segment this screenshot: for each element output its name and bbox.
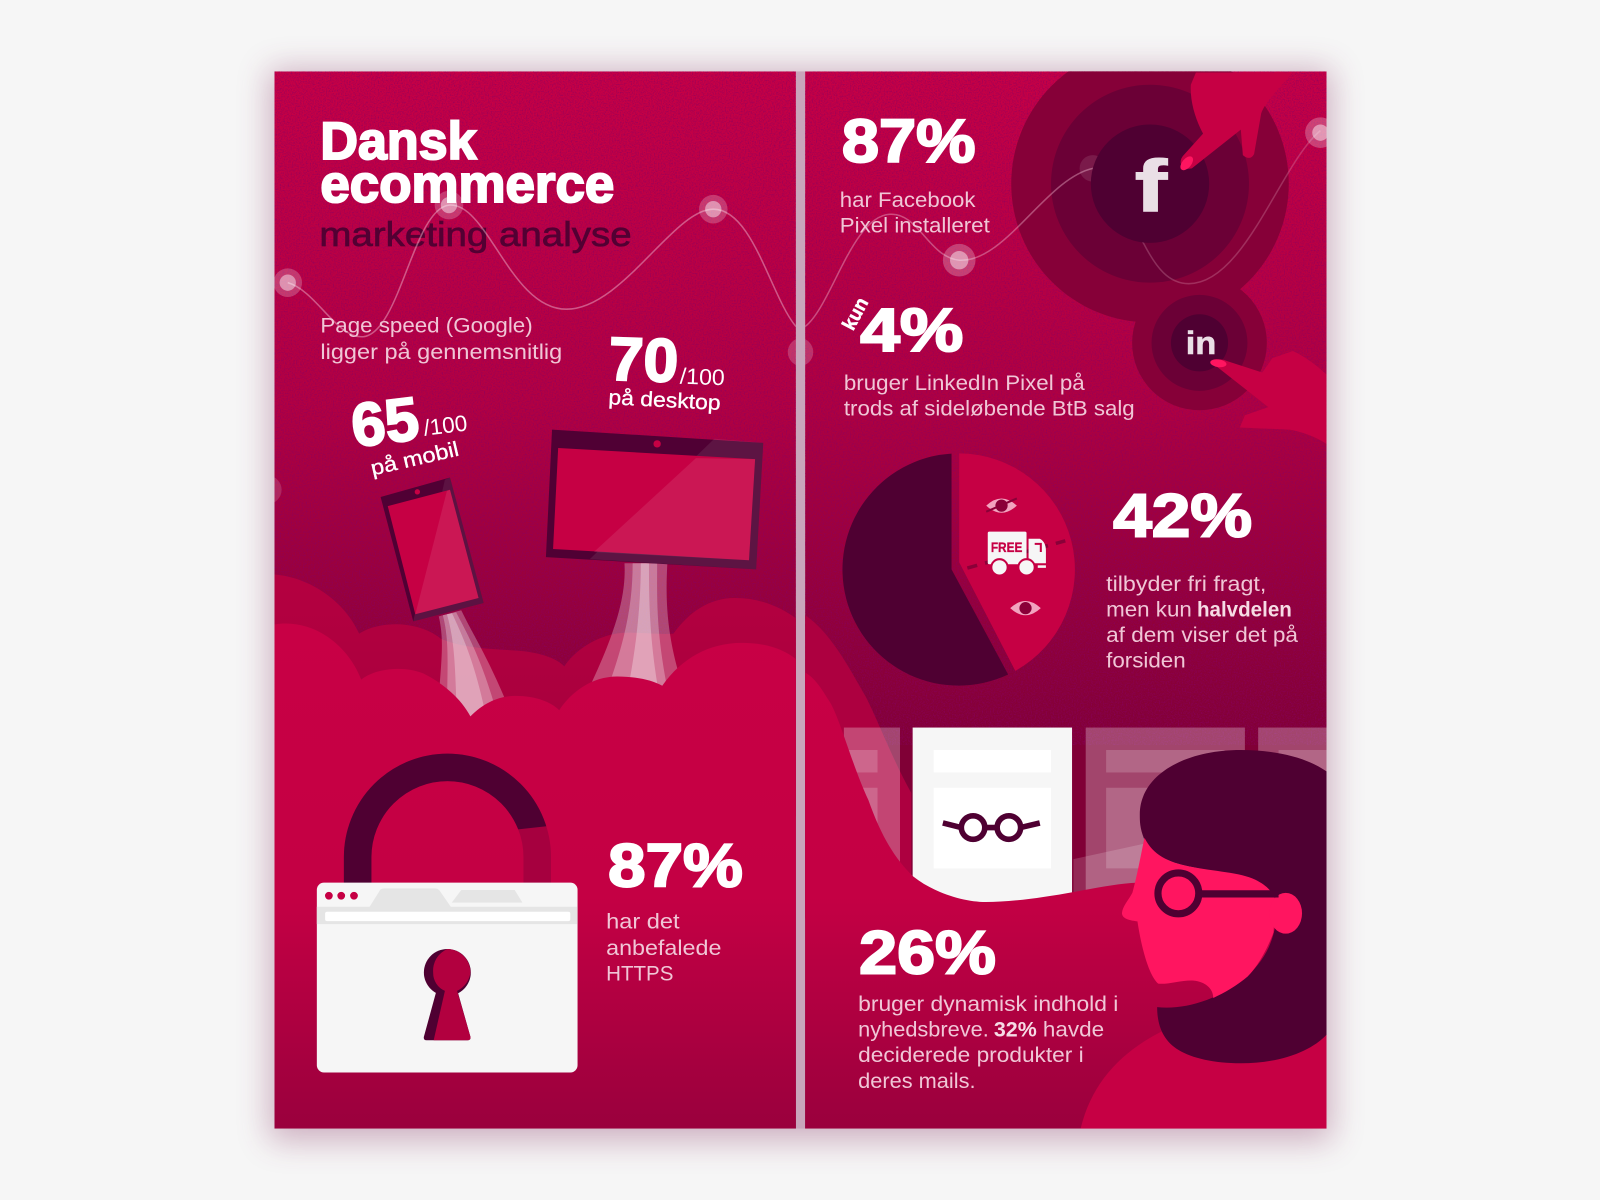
icon: free delivery truck: FREE [991,540,1022,555]
icon: crossed out eye [986,498,1017,513]
shirt [1081,1026,1327,1129]
stat: 26% newsletters: deciderede produkter i [858,1044,1084,1067]
stat: 42% free shipping: 42% [1113,482,1252,550]
hand pointing at linkedin [1210,351,1327,444]
pie chart [842,453,1075,686]
facebook target outer circles [1011,45,1289,322]
panel shadow [269,69,1332,1141]
stat: 4% linkedin: kun [838,294,873,334]
clouds back [274,574,796,816]
stat: 26% newsletters: 26% [859,918,996,986]
left grain texture [274,71,796,666]
hand pointing at facebook [1178,72,1293,172]
linkedin target circles [1132,276,1267,410]
panel: left [253,71,816,1129]
title: ecommerce [320,155,614,214]
back wave [805,615,911,918]
stat: 65/100 mobile [352,396,466,480]
face [1122,838,1276,998]
stat: 4% linkedin [838,294,1135,420]
stat: 42% free shipping: men kun [1106,598,1192,621]
sight beam [1073,843,1148,898]
left background [274,71,796,1129]
stat: 65/100 mobile: 65 [347,384,423,460]
stat: 87% facebook [841,118,990,232]
stat: 42% free shipping [1106,482,1298,672]
stat: 87% facebook: 87% [842,107,976,175]
phone beam [438,610,504,716]
stat: 4% linkedin: 4% [860,296,963,364]
stat: 70/100 desktop: 70 [608,325,679,395]
stat: 4% linkedin: trods af sideløbende BtB salg [844,397,1135,420]
title: Dansk [320,112,477,171]
stat: 87% facebook: har Facebook [840,189,976,212]
panel: right [785,45,1336,1129]
browser dots [325,892,358,900]
stat: 42% free shipping: af dem viser det på [1106,624,1298,647]
stat: 26% newsletters: havde [1043,1019,1104,1042]
glasses on face [1158,873,1279,914]
stat: 87% https: HTTPS [606,963,673,986]
title: marketing analyse [319,216,632,254]
icon: facebook f: f [1135,144,1168,227]
gap between panels [796,71,805,1129]
icon: eye [1010,601,1041,615]
facebook target inner circle [1091,124,1209,243]
stat: 65/100 mobile: /100 [422,411,469,441]
stat: 70/100 desktop: /100 [679,364,725,390]
stat: 65/100 mobile: på mobil [368,438,461,480]
newsletter card highlighted [913,728,1072,906]
stat: 87% facebook: Pixel installeret [840,215,990,238]
page speed intro text: ligger på gennemsnitlig [320,341,562,364]
icon: free delivery truck [988,532,1046,576]
icon: linkedin in: in [1186,324,1216,361]
newsletter cards faded [844,728,1327,901]
icon: keyhole [424,949,471,1040]
stat: 70/100 desktop: på desktop [608,386,721,415]
icon: padlock shackle [358,767,537,886]
stat: 42% free shipping: forsiden [1106,649,1186,672]
stat: 42% free shipping: halvdelen [1197,598,1292,621]
stat: 26% newsletters [858,918,1118,1093]
page speed intro text: Page speed (Google) [320,315,533,338]
icon: glasses [943,816,1040,839]
stat: 26% newsletters: deres mails. [858,1070,976,1093]
browser window padlock [317,883,578,1072]
stat: 87% https: 87% [608,832,743,900]
stat: 87% https: har det [606,911,680,934]
hair [1140,750,1327,1063]
stat: 87% https [607,842,742,980]
ear [1269,893,1302,934]
stat: 4% linkedin: bruger LinkedIn Pixel på [844,372,1085,395]
right background [805,71,1327,1129]
page speed intro text [320,315,562,364]
stat: 70/100 desktop [609,336,724,414]
stat: 87% https: anbefalede [606,937,721,960]
browser tab bar [317,888,578,924]
front wave [805,672,1327,1129]
stat: 26% newsletters: nyhedsbreve. [858,1019,989,1042]
icon: desktop monitor [546,430,763,569]
icon: mobile phone [381,478,484,621]
title [319,112,632,254]
stat: 26% newsletters: 32% [994,1019,1037,1042]
desktop beam [592,563,678,686]
person illustration [1081,750,1327,1129]
line chart right [785,117,1336,366]
right grain texture [805,71,1327,745]
clouds front and lower background [274,624,796,1129]
line chart left [253,191,816,504]
stat: 26% newsletters: bruger dynamisk indhold i [858,993,1118,1016]
stat: 42% free shipping: tilbyder fri fragt, [1106,573,1266,596]
